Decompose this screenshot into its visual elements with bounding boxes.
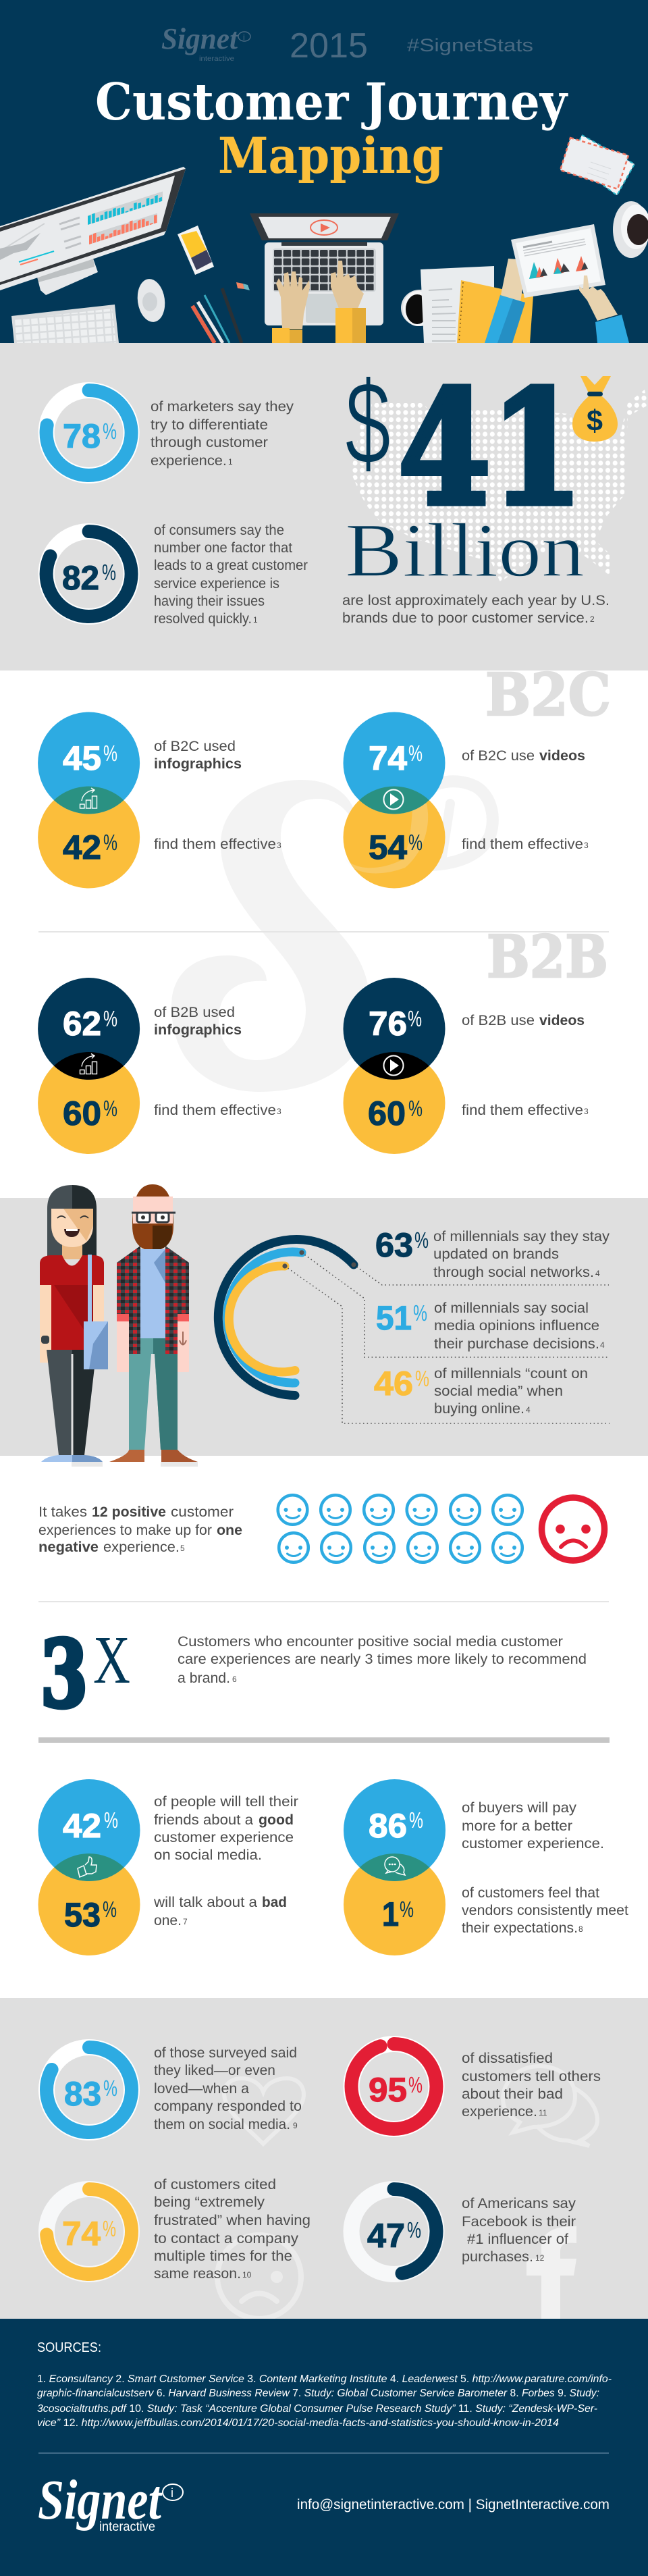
text: marketers: try to differentiate [151,417,268,433]
text: good and bad experience: good [259,1812,294,1828]
stat: 46% millennials: buying online. [434,1401,524,1417]
illustration: pencils [192,282,250,343]
icons: twelve smiley faces [278,1495,522,1562]
text: extremely frustrated: multiple times for the [154,2249,292,2264]
icon: money bag [572,376,618,442]
illustration: woman [40,1185,108,1467]
text: marketers: 1 [228,457,233,467]
text: good and bad experience: one. [154,1913,182,1928]
text: extremely frustrated: frustrated” when having [154,2213,310,2228]
watermark: Signet S logo [171,780,493,1092]
text: B2C videos: 3 [584,841,589,850]
text: B2C videos: of B2C use [462,748,535,764]
text: Facebook influencer: Facebook is their [462,2214,576,2230]
illustration: laptop [250,213,399,325]
icon: rising chart [80,788,97,808]
text: liked or loved: company responded to [154,2099,302,2114]
panel: millennials [0,1184,648,1467]
panel: $41 billion stats [0,343,648,671]
text: dissatisfied customers: customers tell others [462,2069,601,2084]
text: 3X description: a brand. [178,1671,230,1686]
text: Facebook influencer: #1 influencer of [467,2232,568,2247]
venn: buyers and vendors: % [400,1897,414,1922]
text: lost: 2 [590,614,595,624]
stat: 3X: 3 [40,1621,88,1729]
venn: B2B infographics: 60 [63,1095,101,1132]
text: 12 positive experiences: experience. [103,1540,180,1555]
donut: 83% [47,2047,132,2132]
illustration: coffee cup left [401,290,439,326]
text: dissatisfied customers: 11 [539,2108,547,2118]
donut: 83%: 83 [64,2075,101,2113]
text: buyers and vendors: vendors consistently meet [462,1903,628,1918]
donut: 78%: 78 [63,417,101,455]
text: 12 positive experiences: negative [38,1540,99,1555]
stat: 63% millennials: updated on brands [433,1246,559,1262]
donut: 82%: 82 [62,559,99,597]
watermark: chat bubbles [503,2066,597,2146]
stat: 63% millennials: through social networks. [433,1265,594,1280]
sources heading: SOURCES: [37,2340,101,2355]
venn: B2C videos [343,712,446,889]
donut: 78%: % [103,419,117,444]
icon: thumbs up [78,1857,97,1877]
text: B2C infographics: infographics [154,756,242,772]
venn: B2B infographics: % [103,1006,117,1031]
dot map of USA [351,390,648,582]
venn: B2B videos [343,978,446,1154]
footer logo: Signet [38,2469,163,2531]
text: 12 positive experiences: customer [171,1504,234,1520]
text: Facebook influencer: purchases. [462,2249,533,2265]
text: consumers: leads to a great customer [154,558,308,573]
text: liked or loved: they liked—or even [154,2063,275,2078]
text: dissatisfied customers: experience. [462,2104,537,2120]
stat: 3X: X [93,1622,130,1698]
header panel [0,0,648,343]
stat: 46% millennials [374,1365,588,1417]
text: liked or loved: of those surveyed said [154,2045,297,2061]
stat: 51% millennials: media opinions influence [434,1318,599,1334]
text: extremely frustrated [154,2177,310,2282]
text: lost [342,593,610,626]
stat: 51% millennials: of millennials say social [434,1300,589,1316]
donut: 78% [47,390,132,475]
header logo: i [243,32,245,42]
text: good and bad experience [153,1794,298,1928]
text: B2B infographics: 3 [277,1107,281,1116]
text: B2C videos: find them effective [462,837,583,852]
text: B2B videos [462,1013,589,1118]
stat: 63% millennials [375,1226,610,1280]
text: B2B videos: of B2B use [462,1013,535,1028]
venn: buyers and vendors: 1 [382,1895,399,1933]
text: buyers and vendors: of customers feel that [462,1885,599,1901]
stat: 51% millennials: 51 [376,1299,412,1337]
text: lost: brands due to poor customer service. [342,610,589,626]
text: 3X description: 6 [232,1675,237,1684]
text: buyers and vendors: of buyers will pay [462,1800,577,1816]
stat: 63% millennials: 4 [595,1269,600,1278]
text: marketers: of marketers say they [151,399,294,415]
venn: good and bad experience: 42 [63,1807,101,1845]
text: dissatisfied customers [462,2051,601,2120]
watermark: Facebook logo [526,2226,576,2319]
venn: B2C videos: % [408,741,423,766]
text: B2B infographics [154,1005,281,1118]
text: liked or loved: them on social media. [154,2117,290,2132]
text: dissatisfied customers: of dissatisfied [462,2051,553,2066]
text: extremely frustrated: being “extremely [154,2194,265,2210]
stat: 46% millennials: % [415,1366,429,1391]
venn: B2B infographics: 62 [63,1005,101,1043]
text: dissatisfied customers: about their bad [462,2086,563,2102]
text: buyers and vendors [462,1800,628,1936]
donut: 82% [47,531,132,616]
hashtag: #SignetStats [407,35,533,55]
text: good and bad experience: customer experience [154,1830,294,1845]
monitor bar chart [88,191,163,244]
venn: B2B videos: 60 [368,1095,406,1132]
illustration: phone [178,226,214,275]
text: consumers: resolved quickly. [154,611,252,627]
stat: 63% millennials: of millennials say they stay [433,1229,610,1244]
venn: good and bad experience: 53 [64,1896,101,1934]
stat: 46% millennials: social media” when [434,1384,563,1399]
footer logo: i [171,2486,173,2500]
contact line: info@signetinteractive.com | SignetInteractive.com [297,2497,610,2513]
text: B2C videos: videos [539,748,585,764]
year: 2015 [290,26,368,65]
text: Facebook influencer: 12 [535,2253,545,2263]
illustration: envelopes [560,135,634,195]
icon: rising chart [80,1053,97,1074]
sources list: graphic-financialcustserv 6. Harvard Business Review 7. Study: Global Customer Service Barometer 8. Forbes 9. Study: [37,2388,599,2399]
venn: B2C infographics: 45 [63,739,101,777]
donut: 95% [351,2044,436,2129]
text: 12 positive experiences [38,1504,242,1555]
stat: 46% millennials: of millennials “count on [434,1366,588,1382]
venn: B2B videos: % [408,1096,423,1121]
watermark: sad face [217,2235,301,2319]
text: lost: are lost approximately each year by U.S. [342,593,610,608]
venn: B2C videos: 74 [369,739,407,777]
illustration: keyboard [11,305,119,343]
stat: 51% millennials: % [413,1300,427,1325]
venn: good and bad experience: % [104,1808,118,1833]
text: B2B videos: find them effective [462,1103,583,1118]
text: good and bad experience: bad [262,1895,287,1910]
text: Facebook influencer [462,2196,576,2265]
stat: 63% millennials: 63 [375,1226,413,1264]
text: good and bad experience: of people will tell their [154,1794,298,1810]
text: liked or loved [154,2045,302,2132]
donut: 47%: 47 [367,2217,405,2255]
venn: B2C videos: % [408,830,423,855]
text: good and bad experience: friends about a [154,1812,253,1828]
icon: sad face [541,1498,605,1560]
text: 3X description: care experiences are nearly 3 times more likely to recommend [178,1652,587,1667]
text: good and bad experience: on social media. [154,1847,262,1863]
icon: money bag: $ [587,404,603,438]
text: liked or loved: 9 [293,2121,298,2130]
footer panel [0,2319,648,2576]
icon: play button [383,1056,404,1075]
donut: 95%: 95 [369,2071,407,2109]
text: consumers: 1 [253,615,258,625]
text: 3X description [178,1634,587,1686]
venn: B2B infographics [38,978,140,1154]
venn: buyers and vendors: % [409,1808,423,1833]
text: extremely frustrated: to contact a company [154,2231,299,2246]
text: consumers: having their issues [154,594,265,609]
donut: 95%: % [408,2072,423,2097]
text: B2B infographics: infographics [154,1022,242,1038]
chart: concentric arcs [218,1240,356,1395]
text: marketers [151,399,294,469]
illustration: pointing hand [579,275,629,343]
text: B2C infographics: 3 [277,841,281,850]
venn: B2B videos: 76 [369,1005,407,1043]
stat: 51% millennials: 4 [600,1340,605,1350]
text: 3X description: Customers who encounter positive social media customer [178,1634,563,1650]
text: B2B videos: 3 [584,1107,589,1116]
text: good and bad experience: 7 [183,1917,188,1926]
text: 12 positive experiences: It takes [38,1504,87,1520]
big number 41: 41 [398,356,583,540]
illustration: mouse [135,278,167,323]
text: extremely frustrated: 10 [242,2270,252,2280]
venn: buyers and vendors: 86 [369,1807,407,1845]
icon: play button [383,790,404,809]
venn: good and bad experience: % [103,1897,117,1922]
title line 1: Customer Journey [95,72,568,132]
text: marketers: experience. [151,453,227,469]
sources list: vice” 12. http://www.jeffbullas.com/2014/01/17/20-social-media-facts-and-statistics-you-should-know-in-2014 [37,2417,559,2429]
sources list [37,2373,612,2429]
venn: B2B videos: % [408,1006,422,1031]
icon: chat bubbles [385,1857,405,1875]
donut: 47%: % [407,2217,421,2242]
text: extremely frustrated: of customers cited [154,2177,276,2192]
venn: buyers and vendors [344,1779,446,1955]
donut: 82%: % [102,560,116,585]
illustration: coffee cup right [613,201,648,258]
heading: B2C: B2C [485,661,611,729]
text: buyers and vendors: customer experience. [462,1836,604,1851]
venn: B2C videos: 54 [369,829,407,866]
title line 2: Mapping [218,127,443,185]
stat: 51% millennials [376,1299,605,1352]
panel: social media stats [0,1998,648,2319]
venn: B2C infographics [38,712,140,889]
text: 12 positive experiences: 5 [180,1544,185,1553]
heading: B2B: B2B [487,923,608,991]
header logo: Signet [161,22,239,55]
text: 12 positive experiences: one [217,1523,242,1538]
illustration: monitor [0,167,186,295]
text: consumers: of consumers say the [154,523,284,538]
text: good and bad experience: will talk about a [153,1895,257,1910]
text: Facebook influencer: of Americans say [462,2196,576,2211]
donut: 74% [47,2189,132,2274]
illustration: typing hands [272,261,366,343]
text: B2C videos [462,748,589,852]
illustration: tablet [511,224,605,298]
stat: 63% millennials: % [414,1228,429,1253]
text: B2C infographics: find them effective [154,837,276,852]
sources list: 3cosocialtruths.pdf 10. Study: Task “Accenture Global Consumer Pulse Research Study” 11. Study: “Zendesk-WP-Ser- [37,2403,597,2415]
venn: B2C infographics: 42 [63,829,101,866]
sources list: 1. Econsultancy 2. Smart Customer Service 3. Content Marketing Institute 4. Leaderwest 5. http://www.parature.com/info- [37,2373,612,2385]
text: 12 positive experiences: 12 positive [92,1504,166,1520]
donut: 47% [351,2189,436,2274]
text: liked or loved: loved—when a [154,2081,249,2097]
venn: B2C infographics: % [103,741,117,766]
text: B2C infographics [154,739,281,852]
text: marketers: through customer [151,435,268,450]
illustration: man [109,1184,198,1467]
venn: good and bad experience [38,1779,140,1955]
footer logo: interactive [99,2520,155,2534]
text: 12 positive experiences: experiences to make up for [38,1523,212,1538]
word: Billion: Billion [345,508,585,593]
text: B2B videos: videos [539,1013,585,1028]
stat: 51% millennials: their purchase decisions. [434,1336,599,1352]
venn: B2B infographics: % [103,1096,117,1121]
stat: 46% millennials: 46 [374,1365,413,1402]
text: extremely frustrated: same reason. [154,2266,241,2282]
text: B2B infographics: find them effective [154,1103,276,1118]
dollar sign: $ [345,357,391,490]
donut: 74%: % [103,2216,116,2241]
donut: 83%: % [103,2076,117,2101]
illustration: arm holding tablet [485,259,527,343]
text: buyers and vendors: more for a better [462,1818,572,1834]
text: buyers and vendors: their expectations. [462,1920,578,1936]
text: consumers: service experience is [154,576,279,592]
venn: B2C infographics: % [103,830,117,855]
text: buyers and vendors: 8 [578,1924,583,1934]
illustration: paper and notebook [421,266,533,343]
header logo: interactive [199,55,234,63]
text: consumers: number one factor that [154,540,292,556]
donut: 74%: 74 [62,2215,101,2253]
text: consumers [154,523,308,627]
text: B2C infographics: of B2C used [154,739,236,754]
stat: 46% millennials: 4 [526,1405,531,1415]
text: B2B infographics: of B2B used [154,1005,235,1020]
watermark: heart [224,2078,304,2144]
